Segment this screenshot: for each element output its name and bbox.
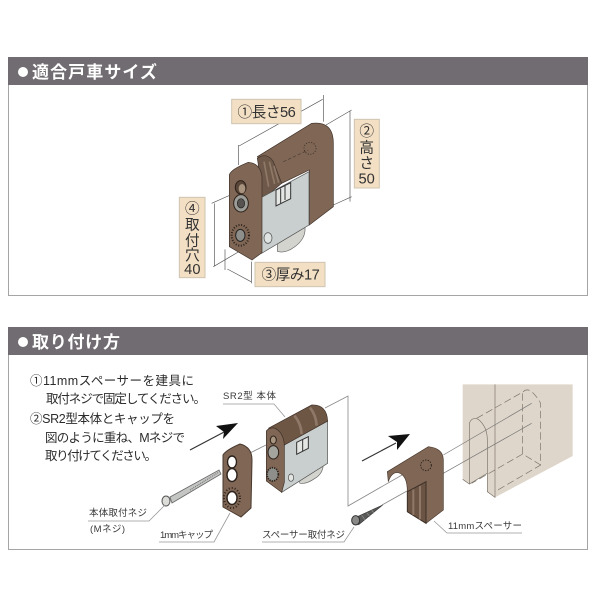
- dimension lines: [212, 95, 352, 283]
- label 4: mounting hole 40: 40: [184, 262, 200, 278]
- label: SR2 body: SR2型 本体: [223, 390, 276, 402]
- instruction text: 取付ネジで固定してください。: [46, 392, 206, 406]
- label: body mounting screw: [88, 505, 165, 535]
- label 2: height 50: 50: [359, 171, 375, 187]
- arrow: left: [190, 423, 238, 450]
- icon: body screw: [162, 470, 221, 506]
- instruction text: 取り付けてください。: [45, 449, 157, 463]
- icon: silver plate: [262, 172, 309, 253]
- heading bar: compatible roller size: [8, 57, 588, 85]
- label 2: height 50: 高: [359, 140, 374, 157]
- label 4: mounting hole 40: [179, 197, 205, 278]
- label 3: thickness 17: ③厚み17: [261, 267, 320, 284]
- label: SR2 body: [223, 390, 285, 417]
- label: spacer mounting screw: [262, 527, 354, 542]
- label: 1mm cap: [159, 513, 230, 542]
- label 3: thickness 17: [255, 262, 325, 287]
- label 2: height 50: [354, 119, 379, 188]
- heading bar: compatible roller size: 適合戸車サイズ: [32, 62, 157, 82]
- diagram: roller with dimensions: [179, 95, 379, 287]
- icon: spacer back body: [257, 123, 333, 225]
- label 4: mounting hole 40: 穴: [185, 247, 200, 264]
- arrow: right: [362, 434, 410, 461]
- heading bar: how to install: 取り付け方: [32, 332, 120, 352]
- label 2: height 50: ②: [359, 123, 374, 140]
- icon: spacer screw: [352, 505, 383, 525]
- panel: how to install: [8, 327, 588, 550]
- label 2: height 50: さ: [359, 155, 374, 172]
- instruction text: ①11mmスペーサーを建具に: [30, 374, 194, 388]
- heading bar: how to install: [8, 327, 588, 355]
- label 4: mounting hole 40: 付: [185, 232, 200, 249]
- label 4: mounting hole 40: 取: [185, 217, 200, 233]
- label 1: length 56: [232, 99, 301, 124]
- label: body mounting screw: (Mネジ): [90, 524, 125, 535]
- label: 1mm cap: 1mmキャップ: [160, 530, 213, 541]
- icon: 1mm cap: [223, 444, 252, 517]
- icon: front brown block: [229, 162, 262, 260]
- instruction text: [30, 374, 206, 463]
- instruction text: 図のように重ね、Mネジで: [45, 430, 185, 445]
- icon: 11mm spacer: [387, 447, 443, 523]
- icon: door frame: [443, 384, 573, 497]
- label 1: length 56: ①長さ56: [237, 104, 296, 121]
- label 4: mounting hole 40: ④: [185, 200, 200, 217]
- icon: SR2 roller body: [266, 405, 328, 492]
- instruction text: ②SR2型本体とキャップを: [30, 412, 175, 426]
- label: 11mm spacer: 11mmスペーサー: [448, 521, 522, 532]
- guide lines: [250, 396, 407, 506]
- icon: wheel: [277, 227, 305, 252]
- panel: compatible roller size: [8, 57, 588, 296]
- label: body mounting screw: 本体取付ネジ: [89, 507, 147, 519]
- label: spacer mounting screw: スペーサー取付ネジ: [262, 530, 345, 541]
